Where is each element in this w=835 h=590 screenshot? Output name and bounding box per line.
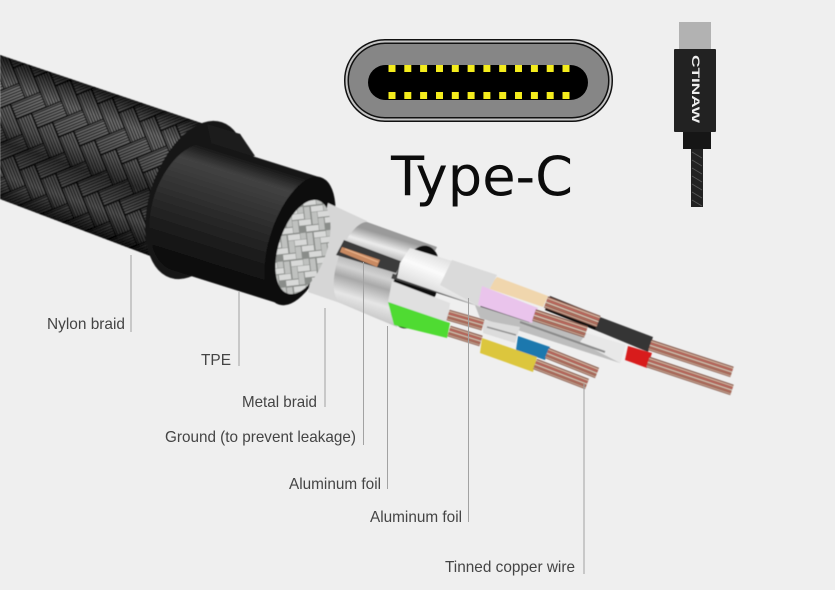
label: metal braid — [242, 308, 325, 411]
label: aluminum foil 1: Aluminum foil — [289, 476, 381, 493]
silver ground foil tube — [334, 222, 450, 335]
nylon braid — [0, 55, 266, 292]
metal braid — [265, 193, 367, 303]
label: aluminum foil 2: Aluminum foil — [370, 509, 462, 526]
label: ground: Ground (to prevent leakage) — [165, 429, 356, 446]
yellow wire — [480, 338, 589, 389]
green wire — [388, 302, 483, 346]
red wire — [625, 346, 734, 395]
Type-C port diagram — [344, 39, 613, 122]
pink wire — [478, 286, 588, 338]
aluminum foil white sleeve — [397, 248, 497, 307]
blue wire — [516, 336, 599, 378]
label: TPE: TPE — [201, 352, 231, 369]
TPE jacket — [149, 143, 350, 314]
label: nylon braid: Nylon braid — [47, 316, 125, 333]
label: metal braid: Metal braid — [242, 394, 317, 411]
port opening — [368, 65, 588, 100]
connector photo — [674, 22, 716, 207]
short twisted foil pair — [483, 320, 520, 343]
label: nylon braid — [47, 255, 131, 333]
far wires: tan and black — [487, 277, 734, 377]
contact pins — [388, 65, 570, 99]
ground slit and copper — [336, 240, 403, 273]
white wire — [388, 281, 485, 330]
brand text: CTINAW — [689, 55, 701, 124]
label: tinned copper wire: Tinned copper wire — [445, 559, 575, 576]
label: TPE — [201, 292, 239, 369]
long twisted grey drain — [392, 276, 625, 363]
title: Type-C — [390, 145, 573, 208]
cable cross-section illustration — [0, 55, 734, 395]
